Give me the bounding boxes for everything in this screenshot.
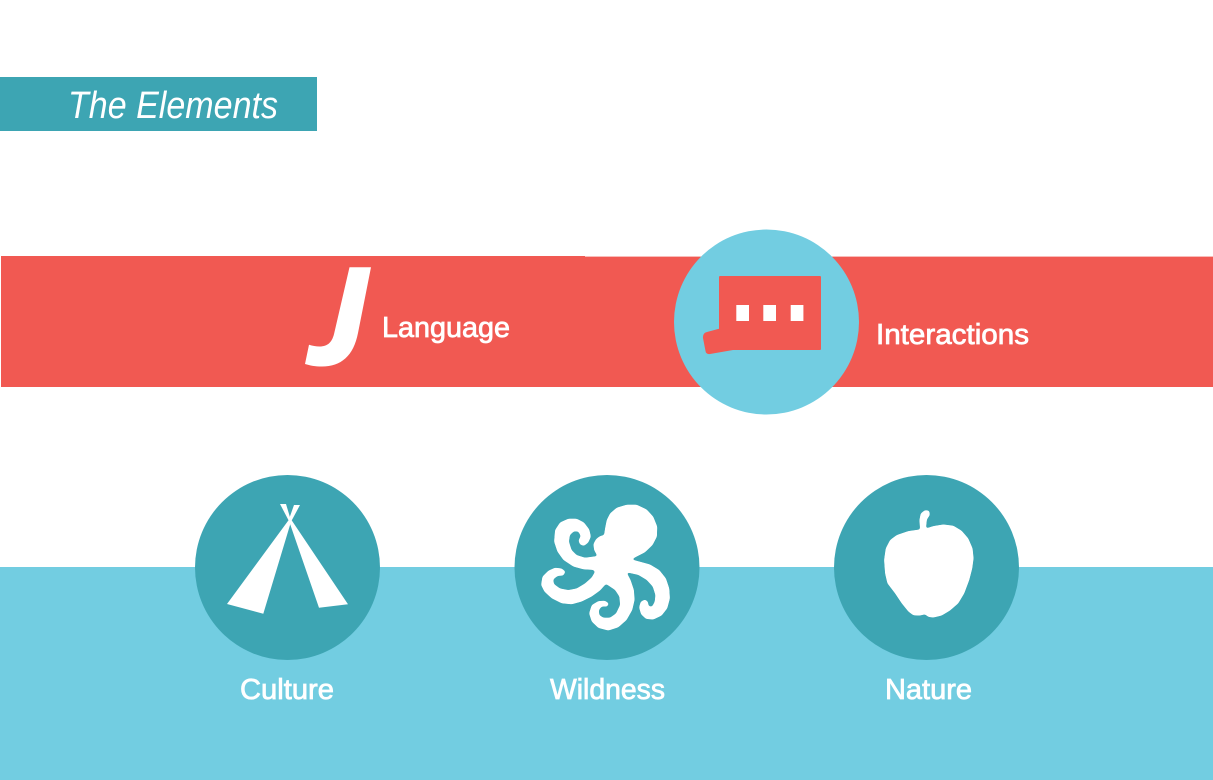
red band	[1, 256, 1213, 387]
banner title: The Elements	[68, 85, 278, 127]
icon: apple	[884, 510, 974, 618]
icon: octopus	[541, 505, 670, 631]
interactions circle	[674, 230, 859, 414]
interactions group	[674, 230, 1029, 414]
label: Wildness: Wildness	[550, 674, 665, 706]
icon: letter J	[305, 267, 371, 366]
header banner	[0, 77, 317, 131]
wildness circle	[514, 475, 700, 660]
language group	[305, 267, 510, 366]
culture circle	[195, 475, 380, 660]
icon: tipi	[227, 504, 348, 614]
label: Culture: Culture	[240, 674, 334, 706]
nature circle	[834, 475, 1019, 660]
culture group	[195, 475, 380, 706]
wildness group	[514, 475, 700, 706]
light blue band	[0, 567, 1213, 780]
icon: speech bubble	[703, 276, 821, 354]
nature group	[834, 475, 1019, 706]
label: Language: Language	[382, 312, 510, 344]
label: Interactions: Interactions	[876, 319, 1029, 351]
label: Nature: Nature	[885, 674, 972, 706]
